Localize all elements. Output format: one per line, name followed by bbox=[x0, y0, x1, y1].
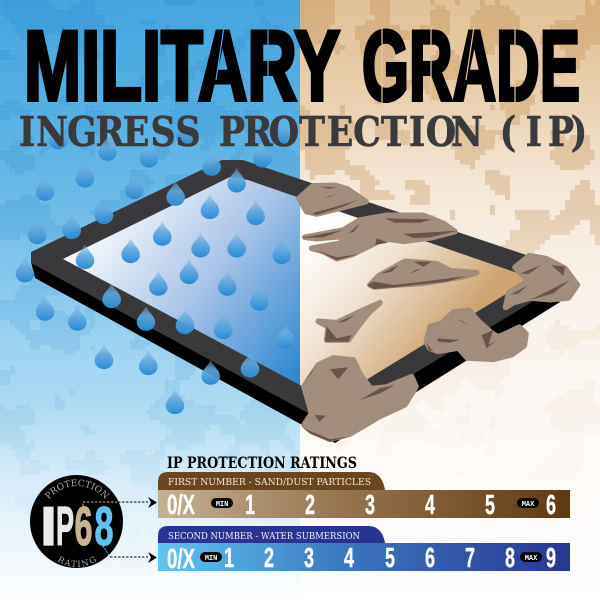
badge code: IP68: 6 bbox=[74, 495, 92, 557]
badge arc label: protection: PROTECTION bbox=[44, 479, 110, 500]
scale numbers: sand: 6 bbox=[546, 489, 556, 520]
scale numbers: sand: 5 bbox=[485, 489, 495, 520]
tab label: second number: SECOND NUMBER - WATER SUBMERSION bbox=[168, 531, 360, 542]
sand pile: right corner bbox=[506, 256, 577, 307]
scale numbers: water: 7 bbox=[465, 542, 475, 573]
sand piles bbox=[299, 185, 577, 442]
scale numbers: water: 2 bbox=[264, 542, 274, 573]
bar: water scale bbox=[158, 543, 570, 571]
screen: sand half bbox=[300, 198, 532, 401]
sand pile: small bbox=[318, 303, 380, 342]
tab: first number bbox=[158, 472, 385, 490]
sand pile: bottom corner bbox=[303, 358, 416, 442]
sand pile: top edge bbox=[299, 185, 366, 215]
badge code: IP68 bbox=[40, 495, 114, 557]
scale numbers: water bbox=[167, 542, 556, 574]
pill: max bbox=[517, 498, 539, 509]
scale numbers: water: 4 bbox=[344, 542, 354, 573]
badge code: IP68: 8 bbox=[94, 495, 114, 557]
background: blue digital camo bbox=[0, 0, 300, 580]
scale numbers: water: 6 bbox=[425, 542, 435, 573]
screen: water half bbox=[63, 177, 300, 385]
pill: min: MIN bbox=[205, 555, 217, 563]
scale numbers: sand: 4 bbox=[425, 489, 435, 520]
tablet device bbox=[31, 160, 565, 443]
badge code: IP68: I bbox=[40, 495, 57, 557]
scale numbers: sand: 0/X bbox=[167, 489, 195, 520]
scale numbers: sand: 1 bbox=[245, 489, 255, 520]
pill: min bbox=[200, 552, 222, 563]
bar: sand scale bbox=[158, 490, 570, 518]
tablet side edge bbox=[31, 262, 560, 443]
subtitle: Ingress Protection (IP): INGRESS PROTECTION (IP) bbox=[19, 107, 587, 156]
drops behind the title bbox=[49, 120, 289, 149]
arrow: first digit to sand bar bbox=[83, 497, 157, 508]
pill: max: MAX bbox=[525, 555, 538, 563]
tab label: first number: FIRST NUMBER - SAND/DUST PARTICLES bbox=[168, 477, 371, 488]
tab: second number bbox=[158, 526, 385, 543]
sand pile: lower right bbox=[426, 310, 526, 359]
pill: max bbox=[520, 552, 542, 563]
scale numbers: water: 0/X bbox=[167, 543, 195, 574]
pill: min: MIN bbox=[216, 501, 228, 509]
badge arc label: rating: RATING bbox=[58, 556, 96, 567]
pill: min bbox=[211, 498, 233, 509]
scale numbers: water: 5 bbox=[385, 542, 395, 573]
scale numbers: sand: 2 bbox=[305, 489, 315, 520]
scale numbers: water: 1 bbox=[224, 542, 234, 573]
background: desert digital camo bbox=[300, 0, 600, 486]
sand pile: large drift bbox=[301, 215, 458, 260]
scale numbers: water: 9 bbox=[546, 542, 556, 573]
sand pile: centre bbox=[367, 261, 477, 289]
badge: IP68 protection rating bbox=[30, 475, 123, 568]
arrow: second digit to water bar bbox=[103, 546, 157, 563]
rating bar: first number, sand/dust bbox=[158, 472, 570, 520]
title: MILITARY GRADE: MILITARY bbox=[24, 10, 340, 121]
tablet frame bbox=[31, 160, 565, 425]
rating bar: second number, water bbox=[158, 526, 570, 574]
pill: max: MAX bbox=[522, 501, 535, 509]
ratings heading: IP PROTECTION RATINGS bbox=[167, 453, 357, 472]
scale numbers: water: 3 bbox=[304, 542, 314, 573]
badge code: IP68: P bbox=[56, 495, 74, 557]
scale numbers: sand: 3 bbox=[365, 489, 375, 520]
scale numbers: water: 8 bbox=[505, 542, 515, 573]
scale numbers: sand bbox=[167, 489, 556, 520]
water drops bbox=[16, 136, 295, 414]
